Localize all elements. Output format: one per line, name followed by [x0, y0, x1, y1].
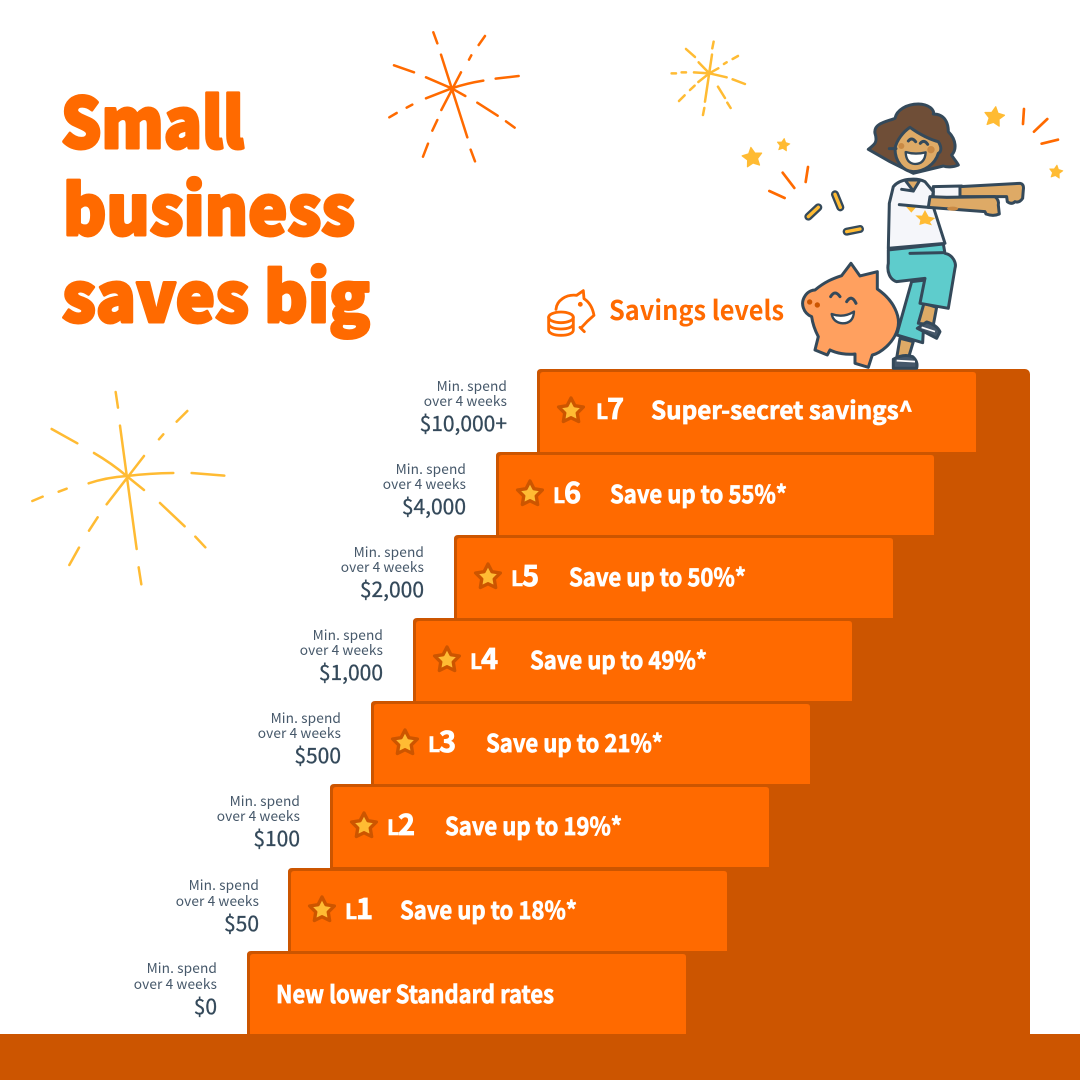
- ground bar: [0, 1034, 1080, 1080]
- step L4: over 4 weeks: [300, 639, 383, 659]
- step L2: 2: [398, 802, 415, 844]
- step L7: [420, 369, 976, 458]
- step standard rates: over 4 weeks: [134, 973, 217, 993]
- step L1: Save up to 18%*: [400, 891, 577, 926]
- step L3: Save up to 21%*: [486, 724, 663, 759]
- piggy bank: [803, 263, 898, 367]
- step L7: L: [596, 396, 608, 426]
- heading: savings levels: Savings levels: [609, 289, 784, 328]
- step L3: [258, 701, 810, 790]
- step L2: $100: [253, 823, 300, 853]
- step L1: L: [345, 896, 357, 926]
- step L6: L: [553, 480, 565, 510]
- step L5: [341, 535, 893, 624]
- step L6: 6: [564, 470, 581, 512]
- step L1: $50: [224, 908, 259, 938]
- step L7: Min. spend: [437, 375, 507, 395]
- firework: yellow top: [672, 42, 745, 115]
- step L2: Min. spend: [230, 790, 300, 810]
- step L4: $1,000: [319, 657, 383, 687]
- step L1: over 4 weeks: [176, 890, 259, 910]
- step L6: $4,000: [402, 491, 466, 521]
- step L3: $500: [294, 740, 341, 770]
- step L5: L: [511, 563, 523, 593]
- icon: piggy bank with coins: [549, 291, 594, 335]
- step L6: [383, 452, 934, 541]
- step L5: over 4 weeks: [341, 556, 424, 576]
- title: business: [63, 155, 355, 255]
- step L3: over 4 weeks: [258, 722, 341, 742]
- step L2: [217, 784, 769, 873]
- step L4: L: [470, 646, 482, 676]
- step L5: $2,000: [360, 574, 424, 604]
- step L1: 1: [356, 886, 373, 928]
- step L1: Min. spend: [189, 874, 259, 894]
- step L3: 3: [439, 719, 456, 761]
- step L3: L: [428, 729, 440, 759]
- step L4: Save up to 49%*: [530, 641, 707, 676]
- illustration: woman and piggy bank: [741, 104, 1064, 368]
- step L5: 5: [522, 553, 539, 595]
- step standard rates: New lower Standard rates: [276, 975, 554, 1010]
- step L7: Super-secret savings^: [651, 391, 913, 426]
- step L5: Save up to 50%*: [569, 558, 746, 593]
- step L1: [176, 868, 727, 957]
- firework: yellow left: [32, 392, 224, 584]
- stairs background: [537, 369, 1030, 1049]
- step L7: 7: [607, 386, 624, 428]
- firework: orange top: [389, 32, 519, 161]
- step L5: Min. spend: [354, 541, 424, 561]
- sparks and stars: [741, 105, 1064, 198]
- step L4: [300, 618, 852, 707]
- step L2: over 4 weeks: [217, 805, 300, 825]
- step L6: Save up to 55%*: [610, 475, 787, 510]
- step L6: over 4 weeks: [383, 473, 466, 493]
- step L2: Save up to 19%*: [445, 807, 622, 842]
- woman: [868, 104, 1023, 368]
- title: Small: [61, 68, 244, 168]
- step standard rates: [134, 951, 686, 1040]
- step L6: Min. spend: [396, 458, 466, 478]
- step L2: L: [387, 812, 399, 842]
- title: saves big: [62, 242, 370, 342]
- falling coins: [808, 194, 860, 232]
- step L4: 4: [481, 636, 498, 678]
- step standard rates: $0: [194, 991, 217, 1021]
- step L3: Min. spend: [271, 707, 341, 727]
- step L7: over 4 weeks: [424, 390, 507, 410]
- step L4: Min. spend: [313, 624, 383, 644]
- step standard rates: Min. spend: [147, 957, 217, 977]
- title: [61, 68, 370, 342]
- step L7: $10,000+: [420, 408, 507, 438]
